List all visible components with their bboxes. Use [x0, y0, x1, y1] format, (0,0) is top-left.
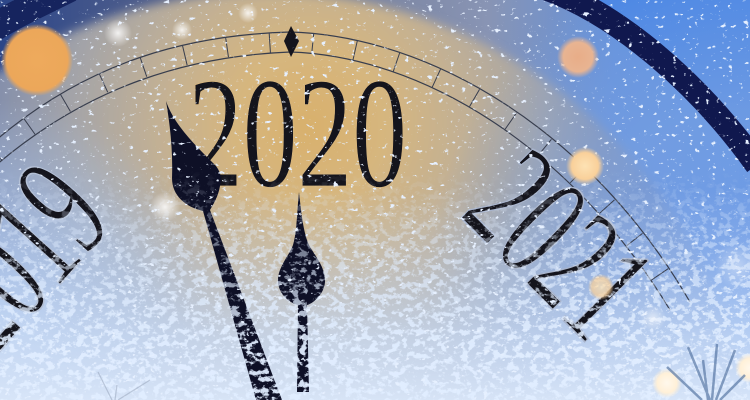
- frosted right side: [430, 0, 750, 400]
- minute hand: [278, 192, 325, 392]
- dial tick ring: [0, 32, 690, 310]
- faint grass at bottom left: [98, 372, 150, 400]
- year 2020: 2020: [188, 46, 407, 221]
- pine branch: [667, 344, 745, 400]
- hour hand: [166, 101, 282, 400]
- diamond marker at twelve: [284, 26, 299, 57]
- rim at top left: [0, 0, 70, 30]
- sky beyond the rim: [580, 0, 750, 170]
- clock rim: [545, 0, 750, 165]
- frosted left edge: [0, 100, 220, 400]
- dense snow on lower clock: [0, 176, 750, 400]
